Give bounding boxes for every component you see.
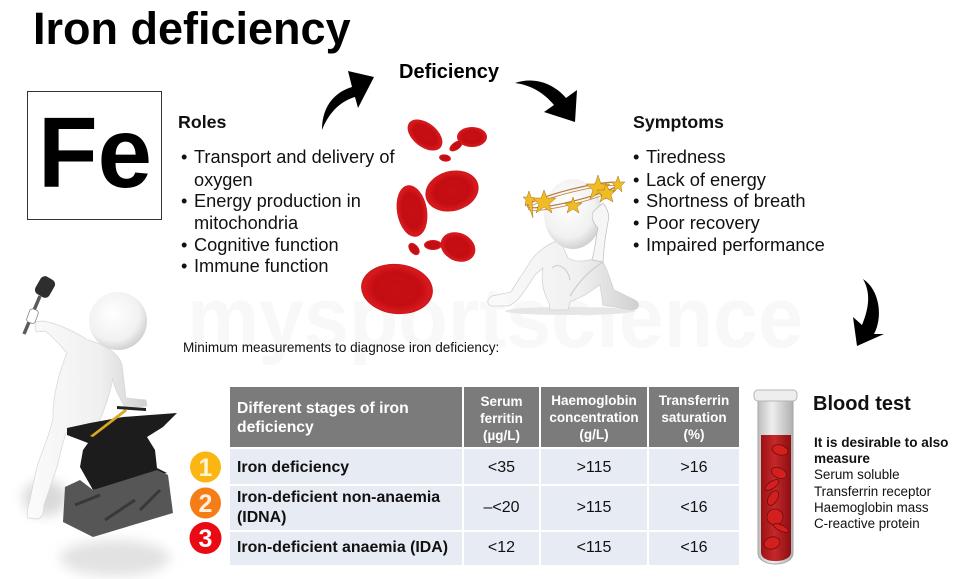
table header: (%) [684,427,704,442]
arrow: deficiency to symptoms [515,81,577,122]
icon: hammer and gold rod [90,406,146,437]
heading: symptoms: Symptoms [633,112,724,132]
table rows [230,449,739,565]
list: roles: Immune function [194,256,328,276]
list: symptoms: • [633,169,639,190]
badge: stage 2 [190,488,221,518]
arrow: roles to deficiency [322,71,374,130]
list: roles: • [181,191,187,211]
list: roles: Transport and delivery of [194,147,395,167]
table header: Transferrin [659,393,729,408]
table rows: Iron-deficient non-anaemia [237,489,440,506]
figure head [89,292,147,350]
figure body [27,321,147,519]
illustration: dizzy figure [488,175,638,315]
text: also measure: It is desirable to also [814,435,948,450]
icon: anvil [67,413,177,490]
table header: ferritin [480,411,523,426]
list: symptoms: • [633,212,639,233]
list: symptoms: Poor recovery [646,212,761,233]
panel: blood test [813,393,948,531]
badge: stage 3 [190,522,222,554]
icon: Fe element box: Fe [38,97,152,209]
illustration: figure at anvil [23,274,177,576]
text: minimum measurements: Minimum measurements to diagnose iron deficiency: [183,340,499,355]
list: roles: • [181,256,187,276]
list: symptoms: Lack of energy [646,169,767,190]
table rows: Iron deficiency [237,459,349,476]
table rows: >115 [577,459,612,476]
table rows: <35 [488,459,515,476]
list: roles: • [181,235,187,255]
illustration: red blood cells [359,113,487,318]
title: Iron deficiency [33,3,351,54]
panel: roles [178,112,395,276]
table header: saturation [661,410,727,425]
table rows: <12 [488,539,515,556]
list: symptoms: Shortness of breath [646,190,806,211]
table rows: <115 [577,539,612,556]
table rows: –<20 [483,499,520,516]
table header: (g/L) [579,427,609,442]
table header: deficiency [237,419,314,436]
list: symptoms: • [633,234,639,255]
table rows: Iron-deficient anaemia (IDA) [237,539,448,556]
icon: mallet [24,274,57,334]
table rows: >115 [577,499,612,516]
table header: concentration [549,410,639,425]
arrow: symptoms to blood test [853,279,884,346]
badge: stage 2: 2 [199,490,212,518]
table header [230,387,739,447]
list: roles: oxygen [194,170,253,190]
text: also measure: measure [814,451,870,466]
table rows: <16 [680,539,708,556]
list: roles: Cognitive function [194,235,339,255]
table: stages of iron deficiency [230,387,739,565]
table header: Serum [480,394,523,409]
list: roles: Energy production in [194,191,361,211]
heading: roles: Roles [178,112,227,132]
badge: stage 1 [190,452,221,482]
illustration: test tube [754,390,797,564]
list: roles: mitochondria [194,213,299,233]
table header: Haemoglobin [551,393,637,408]
text: also measure [814,435,948,531]
heading: Deficiency: Deficiency [399,61,500,83]
list: symptoms [633,146,825,255]
list: symptoms: Tiredness [646,146,726,167]
panel: symptoms [633,112,825,255]
table header: (µg/L) [483,428,520,443]
badge: stage 1: 1 [199,454,213,482]
table rows: >16 [680,459,708,476]
table rows: <16 [680,499,708,516]
heading: blood test: Blood test [813,393,911,415]
icon: rock [63,470,173,537]
list: roles: • [181,147,187,167]
table rows: (IDNA) [237,509,286,526]
list: symptoms: Impaired performance [646,234,825,255]
text: also measure: Haemoglobin mass [814,500,929,515]
list: symptoms: • [633,146,639,167]
text: also measure: C-reactive protein [814,516,920,531]
list: roles [181,147,395,276]
list: symptoms: • [633,190,639,211]
text: also measure: Serum soluble [814,467,900,482]
table header: Different stages of iron [237,400,409,417]
watermark: mysportscience [187,270,803,366]
icon: orbit of stars [523,175,625,218]
badge: stage 3: 3 [199,525,212,553]
text: also measure: Transferrin receptor [814,484,932,499]
